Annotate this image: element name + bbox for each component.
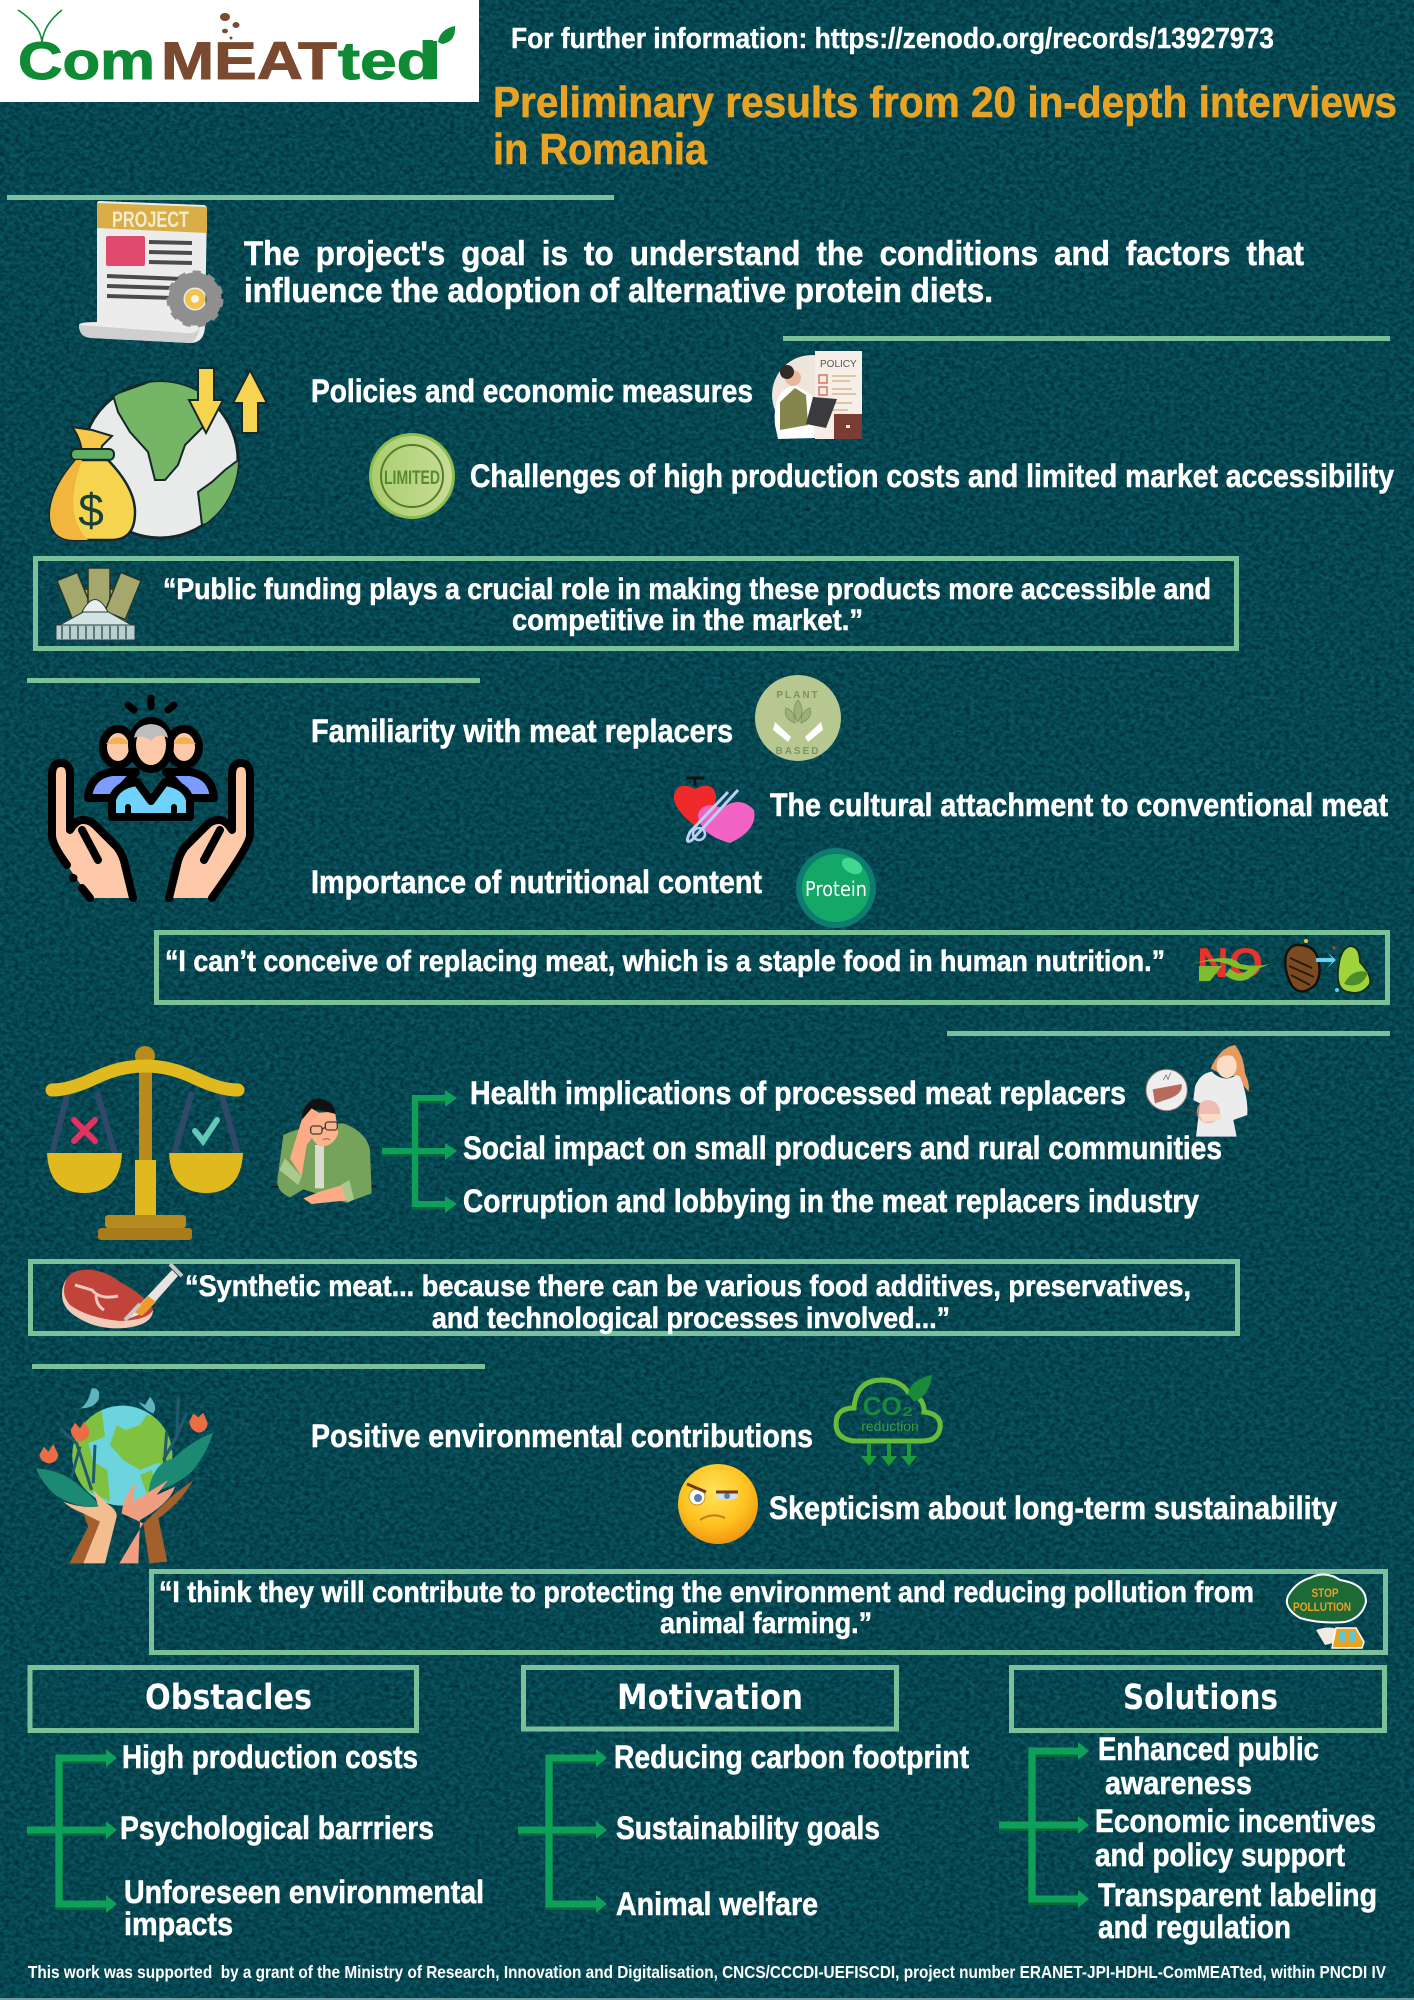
icon: plant based badge — [755, 675, 841, 761]
list: motivation: Reducing carbon footprint — [614, 1739, 969, 1775]
list: obstacles: impacts — [124, 1906, 233, 1942]
logo: MEAT — [161, 32, 337, 91]
list: obstacles: High production costs — [122, 1739, 418, 1775]
icon: policy document — [772, 351, 862, 439]
icon: globe and money bag — [50, 368, 267, 540]
heading: familiarity: Familiarity with meat replacers — [311, 713, 733, 749]
logo — [0, 0, 479, 102]
icon: limited badge — [369, 433, 455, 519]
arrows: obstacles — [27, 1749, 117, 1913]
icon: project document: PROJECT — [112, 207, 189, 232]
list: obstacles — [120, 1739, 484, 1942]
panel: environment — [36, 1375, 1386, 1652]
quote text — [159, 1576, 1254, 1640]
further information link: For further information: https://zenodo.org/records/13927973 — [511, 23, 1274, 55]
panel: header — [0, 0, 1397, 174]
list: solutions: Transparent labeling — [1098, 1877, 1377, 1913]
panel: solutions — [999, 1668, 1384, 1945]
quote text: and technological processes involved...” — [432, 1302, 950, 1335]
icon: limited badge: LIMITED — [384, 468, 440, 489]
arrows: concerns — [382, 1090, 457, 1213]
list: solutions: and regulation — [1098, 1909, 1291, 1945]
list: concerns: Social impact on small producers and rural communities — [463, 1130, 1222, 1166]
heading box: motivation — [524, 1668, 896, 1729]
icon: meat to avocado — [1285, 939, 1370, 993]
icon: worried man — [271, 1098, 376, 1204]
panel: familiarity and culture — [52, 675, 1388, 1002]
list: motivation: Animal welfare — [616, 1886, 818, 1922]
icon: hearts and paperclip — [674, 778, 754, 843]
goal text — [244, 235, 1304, 310]
icon: CO2 reduction cloud: reduction — [861, 1418, 919, 1434]
icon: hands holding globe — [36, 1388, 213, 1563]
icon: globe and money bag: $ — [78, 484, 104, 536]
heading box: solutions: Solutions — [1123, 1678, 1278, 1718]
icon: protein ball — [796, 848, 876, 928]
quote text: “I can’t conceive of replacing meat, which is a staple food in human nutrition.” — [165, 945, 1165, 978]
icon: stop pollution cloud: STOP — [1312, 1586, 1338, 1600]
goal text: influence the adoption of alternative protein diets. — [244, 272, 993, 310]
icon: no meat swoosh: NO — [1197, 939, 1263, 986]
goal text: The project's goal is to understand the conditions and factors that — [244, 235, 1304, 273]
heading: policies: Policies and economic measures — [311, 373, 753, 409]
icon: stop pollution cloud: POLLUTION — [1293, 1600, 1351, 1614]
icon: skeptical emoji — [678, 1464, 758, 1544]
quote box: staple food — [156, 932, 1388, 1002]
panel: motivation — [518, 1668, 969, 1922]
quote text: “Public funding plays a crucial role in making these products more accessible and — [163, 573, 1211, 606]
arrows: solutions — [999, 1742, 1089, 1908]
list: solutions — [1095, 1731, 1377, 1945]
list: motivation: Sustainability goals — [616, 1810, 880, 1846]
icon: stop pollution cloud — [1287, 1574, 1366, 1648]
heading: nutrition: Importance of nutritional content — [311, 864, 762, 900]
icon: policy document: POLICY — [820, 359, 857, 370]
list: concerns — [463, 1075, 1222, 1219]
list: obstacles: Psychological barrriers — [120, 1810, 434, 1846]
icon: balance scale — [47, 1046, 243, 1240]
panel: obstacles — [27, 1668, 484, 1942]
quote text: animal farming.” — [660, 1607, 872, 1640]
quote text: competitive in the market.” — [512, 604, 863, 637]
quote text — [163, 573, 1211, 637]
icon: woman with liver pain — [1146, 1045, 1249, 1137]
quote text — [185, 1270, 1191, 1335]
icon: hands holding people — [52, 698, 250, 898]
quote text: “I think they will contribute to protecting the environment and reducing pollution from — [159, 1576, 1254, 1609]
list: obstacles: Unforeseen environmental — [124, 1874, 484, 1910]
quote box: pollution — [152, 1572, 1386, 1652]
list: motivation — [614, 1739, 969, 1922]
title — [493, 78, 1397, 174]
heading box: motivation: Motivation — [617, 1678, 803, 1718]
quote text: “Synthetic meat... because there can be various food additives, preservatives, — [185, 1270, 1191, 1303]
quote box: public funding — [36, 558, 1236, 648]
list: concerns: Health implications of processed meat replacers — [470, 1075, 1126, 1111]
icon: plant based badge: BASED — [775, 746, 821, 757]
heading: environment: Positive environmental contributions — [311, 1418, 813, 1454]
icon: steak and syringe — [62, 1264, 182, 1328]
heading: skepticism: Skepticism about long-term sustainability — [769, 1490, 1337, 1526]
heading box: obstacles: Obstacles — [145, 1678, 312, 1718]
icon: protein ball: Protein — [805, 877, 867, 901]
icon: project document — [79, 201, 221, 343]
icon: CO2 reduction cloud: CO₂ — [863, 1391, 913, 1421]
logo: Com — [18, 32, 155, 91]
quote box: synthetic meat — [30, 1262, 1238, 1335]
icon: plant based badge: PLANT — [776, 690, 820, 701]
panel: policies and economic measures — [36, 351, 1394, 648]
list: solutions: Enhanced public — [1098, 1731, 1319, 1767]
panel: project goal — [79, 201, 1304, 343]
list: solutions: Economic incentives — [1095, 1803, 1376, 1839]
heading box: solutions — [1012, 1668, 1384, 1730]
icon: money and capitol — [56, 568, 141, 640]
heading box: obstacles — [30, 1668, 416, 1730]
title: in Romania — [493, 125, 707, 174]
logo: ted — [338, 32, 437, 91]
arrows: motivation — [518, 1749, 607, 1913]
list: solutions: awareness — [1105, 1765, 1252, 1801]
panel: health and social concerns — [30, 1045, 1249, 1335]
list: concerns: Corruption and lobbying in the meat replacers industry — [463, 1183, 1199, 1219]
list: solutions: and policy support — [1095, 1837, 1345, 1873]
icon: CO2 reduction cloud — [836, 1375, 940, 1466]
